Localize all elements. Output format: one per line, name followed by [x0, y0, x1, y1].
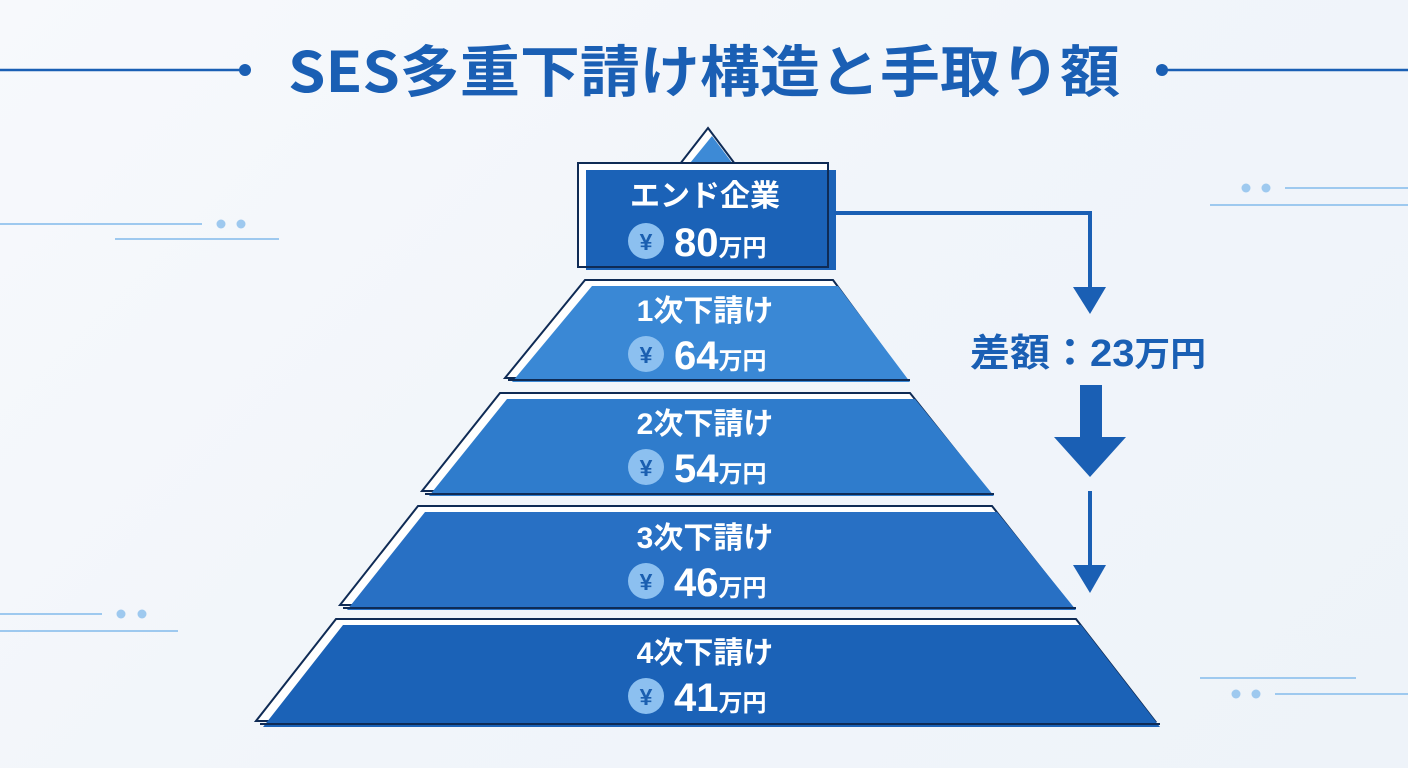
label: tier 4: [628, 637, 773, 720]
label: tier 2: 54万円: [674, 447, 766, 491]
label: tier 2: ¥: [640, 455, 653, 481]
arrow: connector from top: [834, 213, 1106, 314]
label: end company: [628, 180, 780, 265]
arrow: lower: [1073, 491, 1106, 593]
label: tier 2: 2次下請け: [637, 408, 773, 441]
label: tier 4: 41万円: [674, 676, 766, 720]
apex triangle: [680, 128, 736, 168]
tier 2 shape: [422, 393, 994, 496]
pyramid: [256, 128, 1160, 727]
label: tier 4: 4次下請け: [637, 637, 773, 670]
top box: [578, 163, 836, 270]
callout: difference: 差額：23万円: [970, 333, 1206, 375]
label: tier 2: [628, 408, 773, 491]
tier 3 shape: [340, 506, 1076, 610]
tier 4 shape: [256, 619, 1160, 727]
label: tier 1: 1次下請け: [637, 295, 773, 328]
label: tier 1: [628, 295, 773, 378]
label: end company: エンド企業: [630, 180, 780, 213]
label: tier 1: 64万円: [674, 334, 766, 378]
label: tier 3: 46万円: [674, 561, 766, 605]
title: SES多重下請け構造と手取り額: [288, 28, 1120, 109]
tier 1 shape: [505, 280, 910, 382]
label: tier 4: ¥: [640, 684, 653, 710]
label: tier 3: ¥: [640, 569, 653, 595]
arrow: big down: [1054, 385, 1126, 477]
label: tier 3: [628, 522, 773, 605]
decorative lines: [0, 184, 1408, 698]
label: tier 3: 3次下請け: [637, 522, 773, 555]
label: tier 1: ¥: [640, 342, 653, 368]
label: end company: ¥: [640, 229, 653, 255]
label: end company: 80万円: [674, 221, 766, 265]
labels: [628, 180, 780, 720]
title: [0, 28, 1408, 109]
